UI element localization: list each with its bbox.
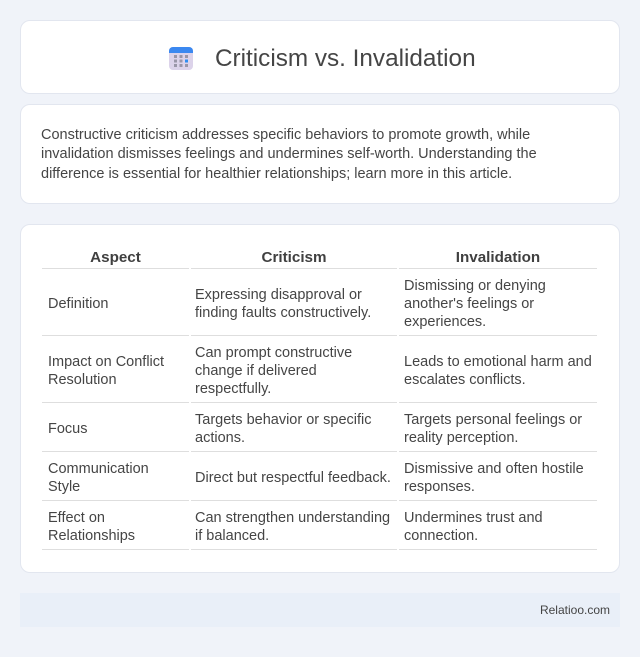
panel: introduction [20, 104, 620, 204]
row: Communication invalidation: responses. [404, 479, 475, 495]
row: Impact invalidation: escalates conflicts. [404, 372, 526, 388]
row: Focus criticism: Targets behavior or specific [195, 412, 372, 428]
heading: Invalidation: Invalidation [456, 249, 540, 266]
row: Impact criticism: Can prompt constructive [195, 345, 352, 361]
row: Impact aspect [48, 354, 164, 388]
row: Definition criticism: Expressing disapproval or [195, 287, 362, 303]
row: Communication invalidation [404, 461, 584, 495]
row: Effect aspect [48, 510, 135, 544]
row: Effect aspect: Effect on [48, 510, 105, 526]
row: Focus invalidation: reality perception. [404, 430, 518, 446]
row: Effect criticism: if balanced. [195, 528, 269, 544]
row: Communication invalidation: Dismissive and often hostile [404, 461, 584, 477]
row: Focus criticism: actions. [195, 430, 245, 446]
row: Effect aspect: Relationships [48, 528, 135, 544]
footer text: Relatioo.com [540, 603, 610, 617]
panel: comparison table card [20, 224, 620, 573]
row: Impact criticism: change if delivered [195, 363, 317, 379]
row: Communication criticism: Direct but respectful feedback. [195, 470, 391, 486]
text: intro line 3: difference is essential for healthier relationships; learn more in this article. [41, 166, 512, 182]
row: Definition criticism [195, 287, 371, 321]
row: Communication aspect: Communication [48, 461, 149, 477]
heading: Criticism: Criticism [262, 249, 326, 266]
text: intro line 1: Constructive criticism addresses specific behaviors to promote growth, while [41, 127, 530, 143]
row: Definition invalidation: another's feelings or [404, 296, 534, 312]
row: Effect invalidation [404, 510, 543, 544]
row: Impact criticism: respectfully. [195, 381, 271, 397]
row: Focus invalidation [404, 412, 582, 446]
row: Focus invalidation: Targets personal feelings or [404, 412, 582, 428]
row: Definition invalidation [404, 278, 546, 330]
footer bar [20, 593, 620, 627]
title: Criticism vs. Invalidation [215, 45, 476, 72]
row: Definition invalidation: experiences. [404, 314, 486, 330]
row: Effect criticism: Can strengthen understanding [195, 510, 390, 526]
text: intro line 2: invalidation dismisses feelings and undermines self-worth. Understanding the [41, 146, 537, 162]
icon: calendar [169, 47, 193, 70]
row: Impact criticism [195, 345, 352, 397]
row: Effect criticism [195, 510, 390, 544]
row: Definition aspect: Definition [48, 296, 108, 312]
row: Focus aspect: Focus [48, 421, 88, 437]
row: Communication aspect: Style [48, 479, 80, 495]
panel: title card [20, 20, 620, 94]
heading: Aspect: Aspect [90, 249, 141, 266]
row: Definition criticism: finding faults constructively. [195, 305, 371, 321]
row: Impact invalidation: Leads to emotional harm and [404, 354, 592, 370]
row: Effect invalidation: Undermines trust and [404, 510, 543, 526]
row: Definition invalidation: Dismissing or denying [404, 278, 546, 294]
row: Communication aspect [48, 461, 149, 495]
row: Impact invalidation [404, 354, 592, 388]
row: Impact aspect: Resolution [48, 372, 117, 388]
row: Impact aspect: Impact on Conflict [48, 354, 164, 370]
row: Effect invalidation: connection. [404, 528, 478, 544]
row: Focus criticism [195, 412, 372, 446]
